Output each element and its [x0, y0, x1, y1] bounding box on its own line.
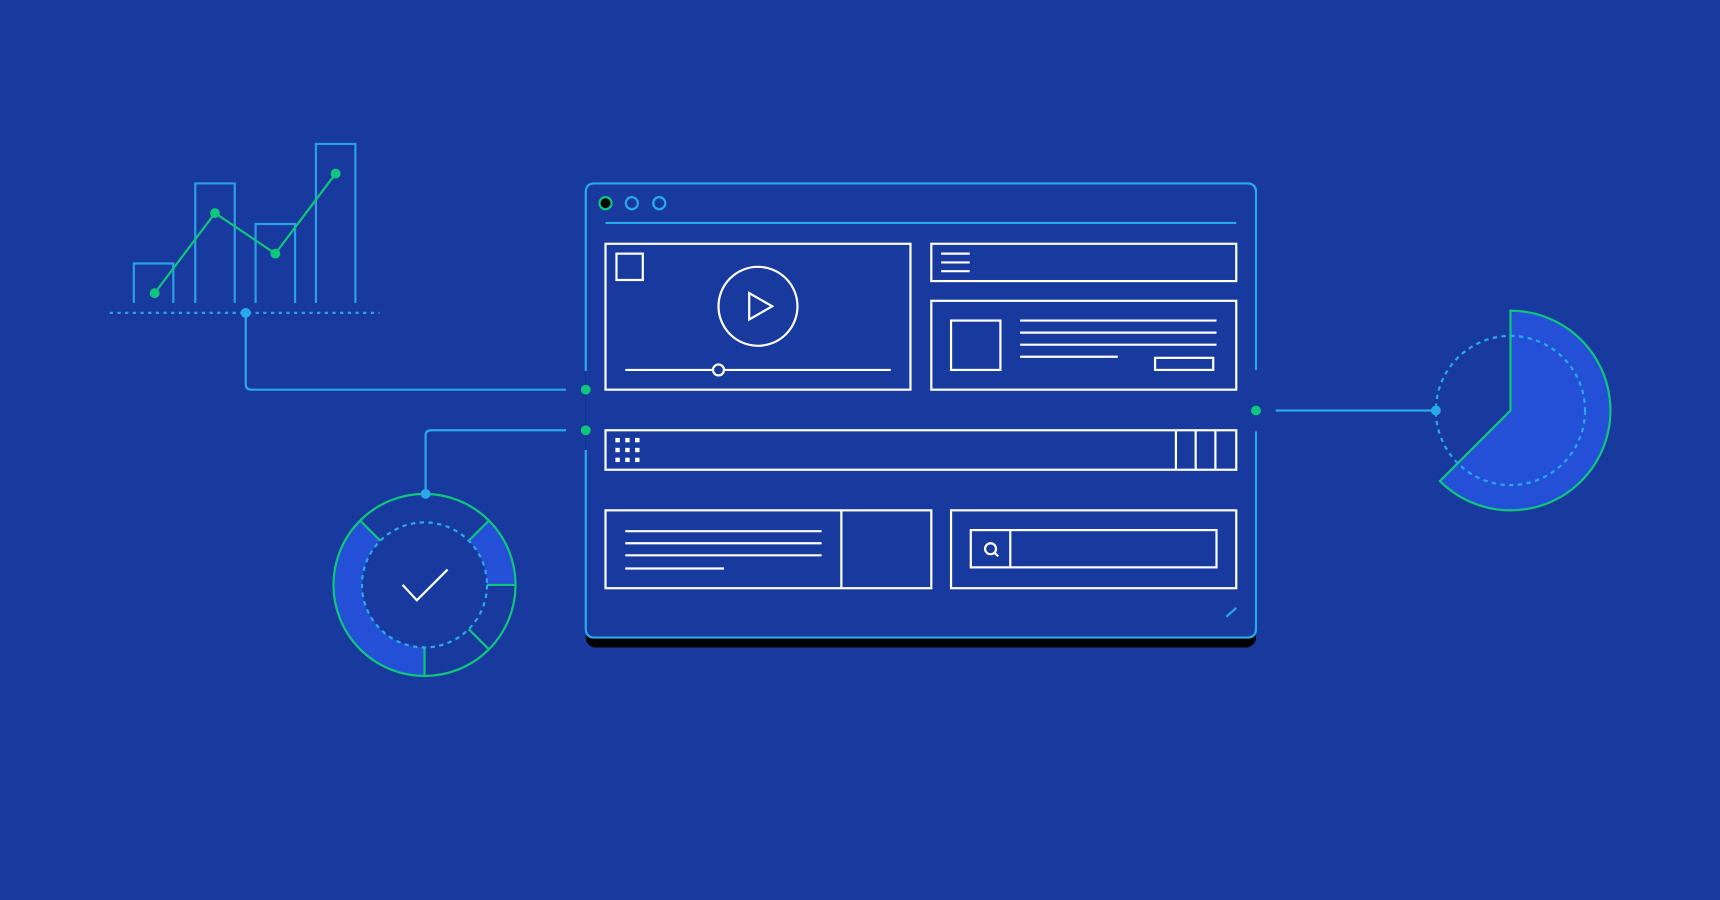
connector: window to pie: [1276, 410, 1436, 412]
video player panel: [606, 244, 910, 390]
bar chart: [110, 144, 380, 318]
icon: checkmark: [403, 570, 448, 600]
pie chart: [1431, 311, 1610, 510]
search panel: [951, 510, 1236, 588]
text panel: [606, 510, 931, 588]
connector: donut to window: [426, 430, 566, 494]
connector: chart to window: [246, 313, 566, 390]
icon: grid: [615, 438, 640, 462]
window controls: [599, 197, 612, 209]
toolbar panel: [606, 430, 1236, 470]
article card panel: [931, 301, 1236, 390]
donut chart: [333, 489, 516, 676]
menu bar panel: [931, 244, 1236, 281]
browser window: [581, 183, 1261, 647]
